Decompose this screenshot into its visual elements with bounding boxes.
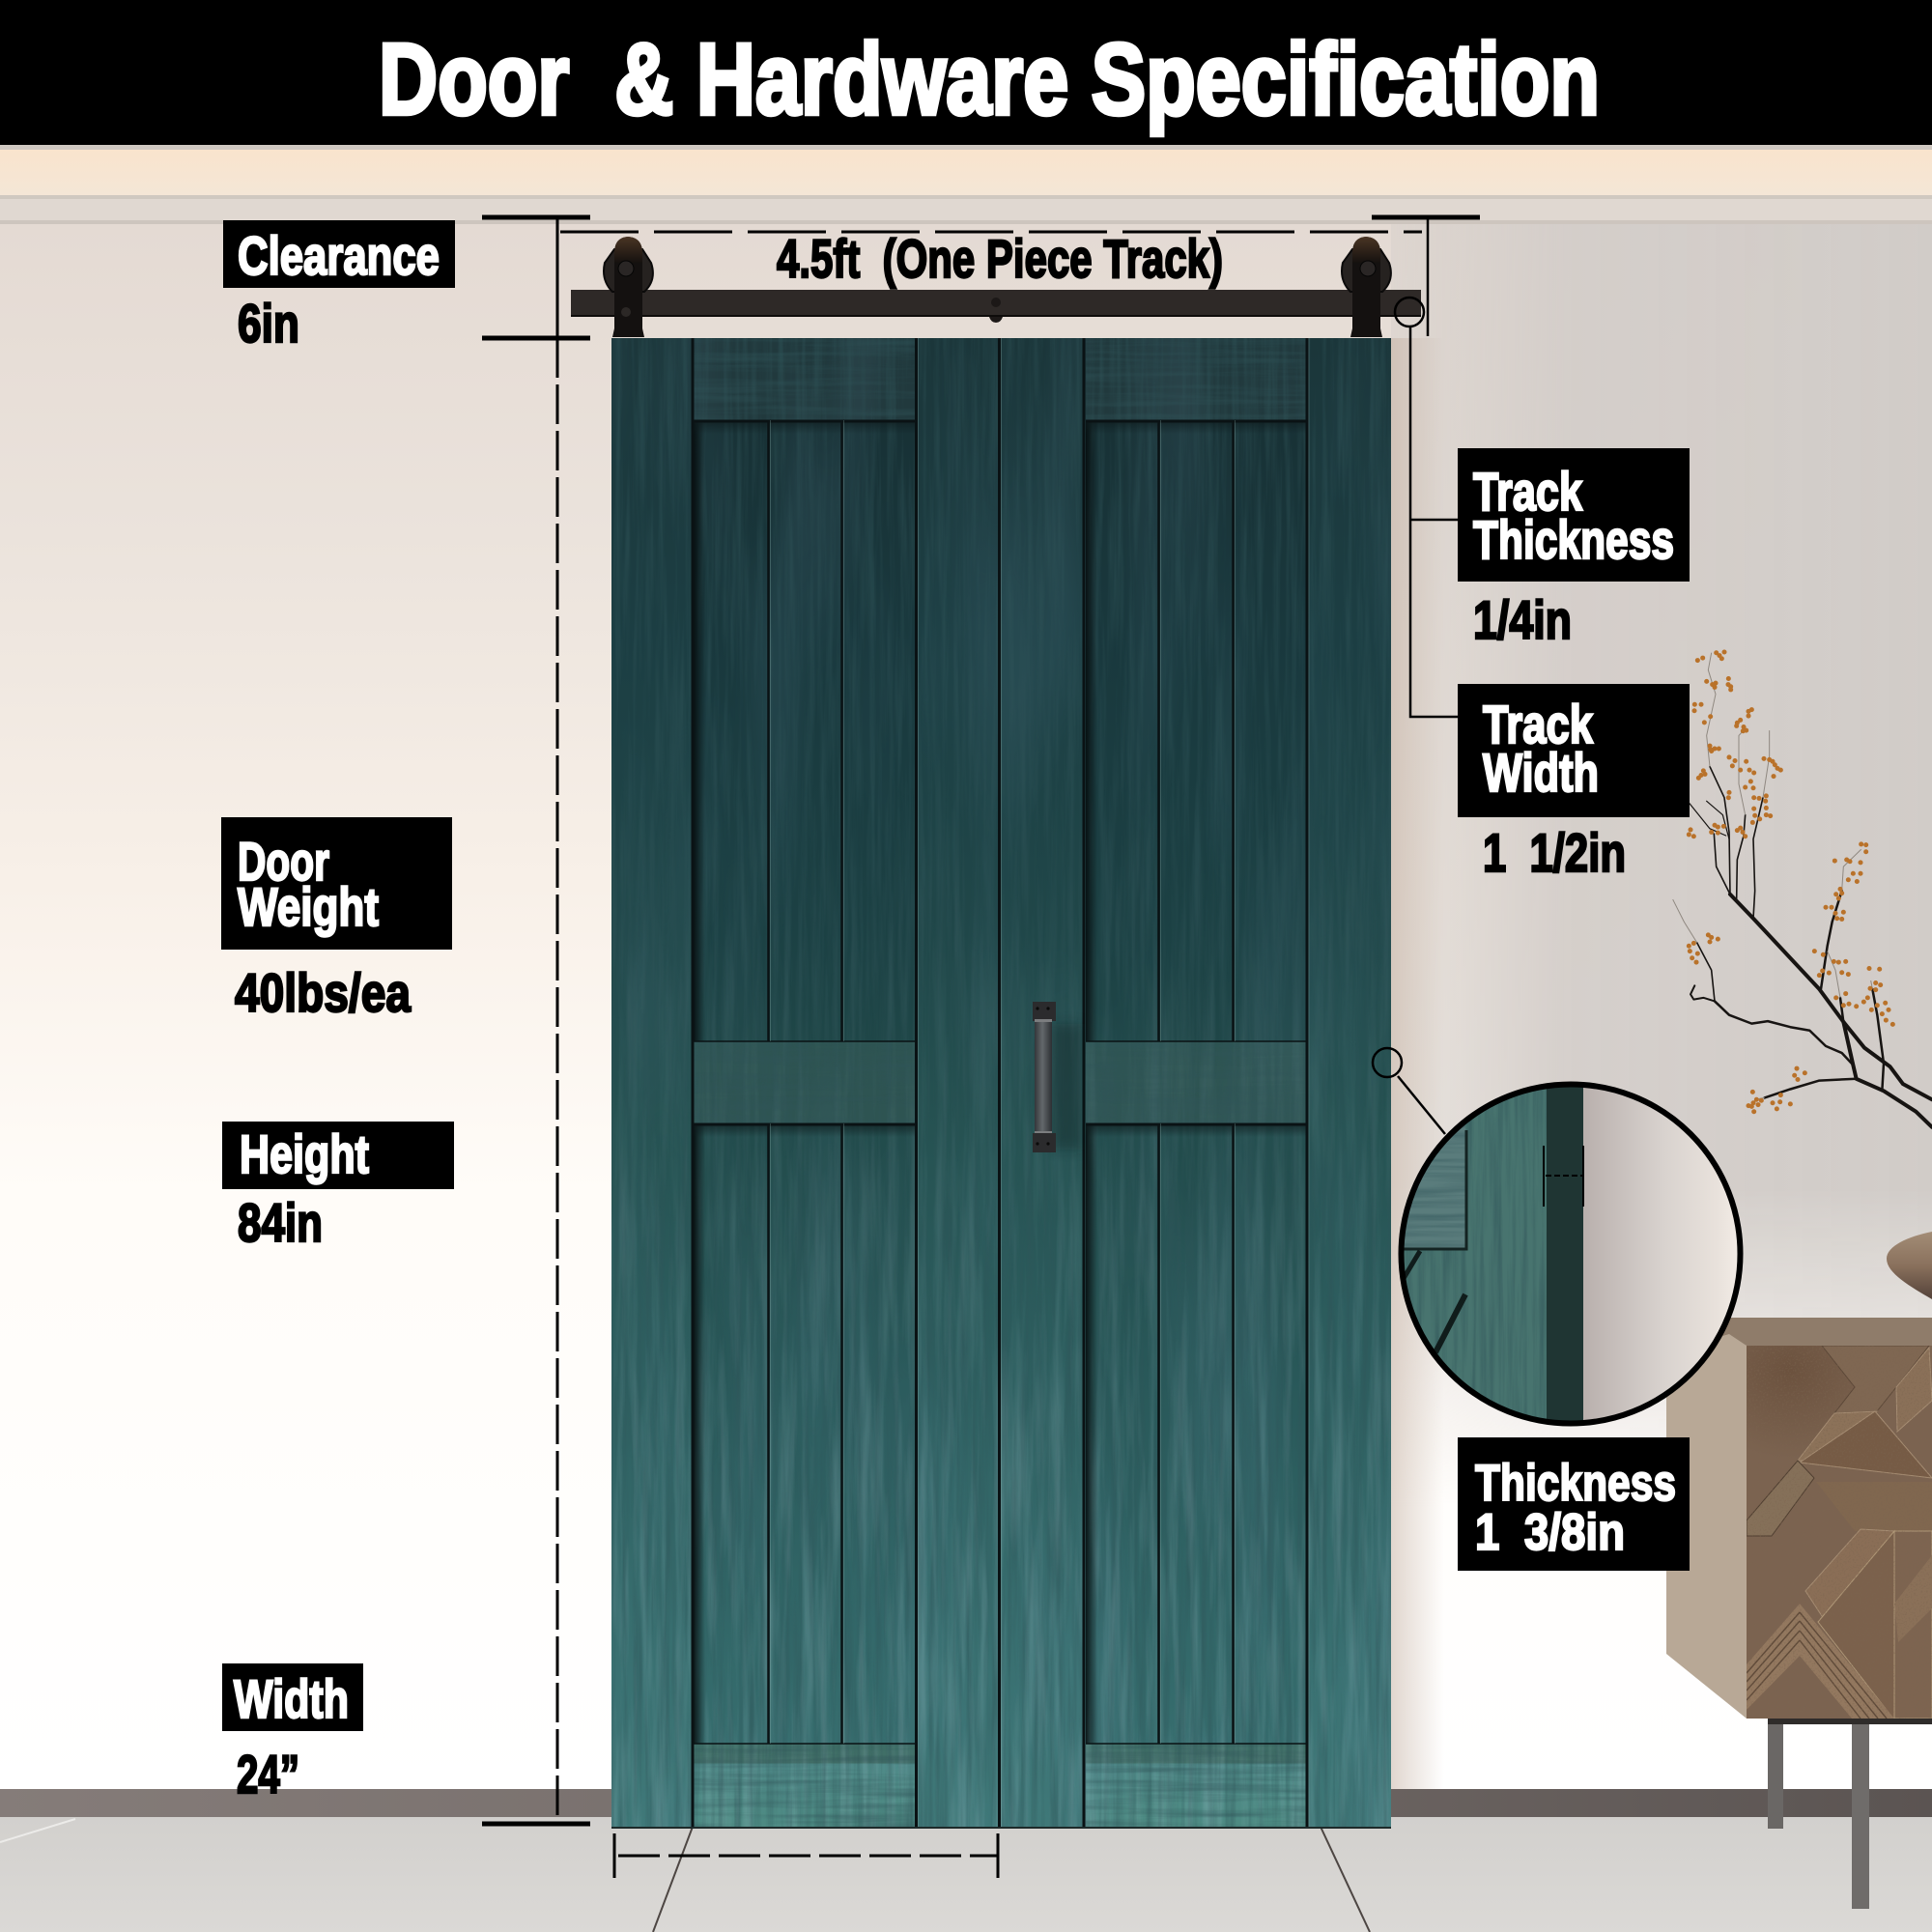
panel inner shadows <box>694 420 1306 1744</box>
wood grain texture <box>639 338 1286 1459</box>
label: width: Width <box>234 1668 349 1729</box>
label: track width <box>1458 684 1690 817</box>
label: door weight: Weight <box>238 876 379 937</box>
door frame stiles <box>611 338 1391 1827</box>
inset: door thickness detail <box>1373 1048 1747 1430</box>
label: door thickness: 1 3/8in <box>1475 1504 1625 1561</box>
value: door weight: 40lbs/ea <box>235 962 412 1023</box>
ceiling band and crown moulding <box>0 145 1932 224</box>
floor <box>0 1817 1932 1932</box>
label: height <box>222 1122 454 1189</box>
door width dimension <box>614 1833 998 1878</box>
branch with orange berries <box>1673 652 1932 1127</box>
title bar: Door & Hardware Specification <box>379 23 1600 136</box>
door handle <box>1033 1002 1082 1152</box>
cabinet side <box>1666 1334 1747 1719</box>
baseboard <box>0 1789 1932 1817</box>
cabinet legs <box>1768 1719 1932 1909</box>
cabinet front with relief facets <box>1747 1346 1932 1719</box>
left hanger wheel <box>604 237 653 337</box>
track rail <box>571 290 1421 317</box>
clearance and height dimension lines <box>482 217 590 1824</box>
cabinet top <box>1710 1318 1932 1346</box>
door shadow line on floor <box>611 1824 1391 1829</box>
track callout lines <box>1395 298 1459 717</box>
sliding track hardware <box>571 237 1421 337</box>
label: clearance: Clearance <box>238 225 440 286</box>
value: width: 24” <box>237 1744 299 1804</box>
recessed plank panels <box>694 420 1306 1744</box>
right hanger wheel <box>1342 237 1391 337</box>
label: track thickness <box>1458 448 1690 582</box>
door rails <box>694 1042 1306 1827</box>
label: door weight: Door <box>238 831 329 892</box>
label: track thickness: Thickness <box>1473 509 1674 570</box>
label: track width: Track <box>1483 694 1594 754</box>
label: height: Height <box>240 1123 369 1184</box>
plank and stile seams <box>693 338 1307 1827</box>
value: track width: 1 1/2in <box>1483 822 1626 883</box>
label: door thickness <box>1458 1437 1690 1571</box>
vase on cabinet <box>1887 1232 1932 1299</box>
track length dimension <box>560 217 1480 336</box>
title bar <box>0 0 1932 145</box>
cabinet <box>1666 1318 1932 1909</box>
label: door thickness: Thickness <box>1475 1455 1676 1512</box>
barn door <box>611 338 1391 1829</box>
label: track width: Width <box>1483 742 1599 803</box>
value: height: 84in <box>238 1192 323 1253</box>
inset pointer <box>1373 1048 1445 1134</box>
track center bolt <box>989 298 1003 323</box>
value: track thickness: 1/4in <box>1473 589 1572 650</box>
value: clearance: 6in <box>238 293 299 354</box>
label: door weight <box>221 817 452 950</box>
label: track thickness: Track <box>1473 461 1583 522</box>
track length label: 4.5ft (One Piece Track) <box>777 228 1223 289</box>
